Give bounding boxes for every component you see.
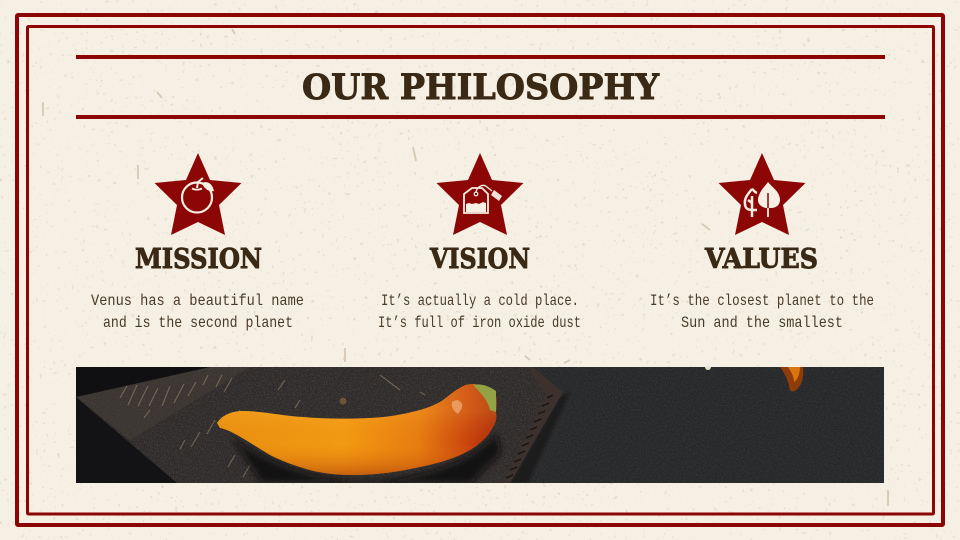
text: values description: It’s the closest planet to the [650, 292, 874, 310]
text: vision description: It’s actually a cold place. [381, 292, 579, 310]
heading: values: VALUES [704, 244, 818, 275]
text: mission description [91, 292, 304, 332]
text: mission description: and is the second planet [103, 314, 293, 332]
wooden board [76, 367, 566, 483]
text: vision description [378, 292, 581, 332]
text: vision description: It’s full of iron oxide dust [378, 314, 581, 332]
heading: mission: MISSION [135, 244, 262, 275]
pepper [217, 384, 497, 475]
column: values [650, 153, 874, 332]
text: mission description: Venus has a beautiful name [91, 292, 304, 310]
small pepper at top edge [780, 367, 803, 392]
title block: OUR PHILOSOPHY [302, 67, 660, 108]
photo: orange chili pepper on a dark wooden board [76, 364, 884, 483]
title block [76, 55, 885, 119]
icon: star with tea bag [436, 153, 524, 235]
icon: star with apple [154, 153, 242, 235]
pepper shadow [232, 433, 501, 483]
heading: vision: VISION [429, 244, 530, 275]
text: values description: Sun and the smallest [681, 314, 843, 332]
text: values description [650, 292, 874, 332]
column: mission [91, 153, 304, 332]
icon: star with leaves [718, 153, 806, 235]
column: vision [378, 153, 581, 332]
